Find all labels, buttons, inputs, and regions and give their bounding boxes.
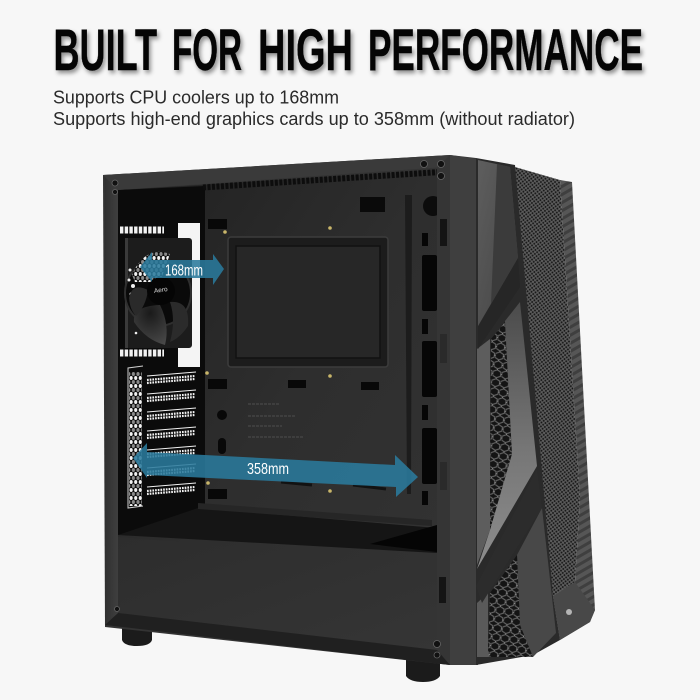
right frame post bbox=[437, 155, 450, 665]
honeycomb behind fan bbox=[132, 252, 170, 282]
middle light panel bbox=[477, 302, 537, 569]
right groove bbox=[405, 195, 412, 494]
pc case bbox=[103, 155, 595, 682]
cpu cutout bbox=[228, 237, 388, 367]
shroud top surface bbox=[118, 508, 437, 553]
honeycomb column bbox=[129, 372, 142, 506]
line: CPU cooler support: Supports CPU coolers up to 168mm bbox=[53, 88, 339, 108]
fan rail bbox=[125, 238, 128, 348]
psu shroud bbox=[118, 503, 437, 650]
top notch bbox=[360, 197, 385, 212]
upper shard bbox=[478, 160, 518, 326]
fan opening bbox=[125, 260, 191, 326]
pci slot bracket bbox=[128, 366, 196, 508]
fan housing bbox=[126, 238, 192, 348]
bottom vent row bbox=[120, 350, 164, 356]
front bezel column bbox=[450, 155, 478, 665]
panel faint marks bbox=[248, 404, 304, 437]
left frame post bbox=[105, 176, 118, 626]
line: graphics card support: Supports high-end graphics cards up to 358mm (without radiator) bbox=[53, 109, 575, 129]
diagonal band lower bbox=[476, 469, 542, 603]
shroud front bbox=[118, 537, 437, 650]
front corner base bbox=[553, 582, 595, 640]
brand emblem bbox=[566, 609, 572, 615]
case body frame bbox=[103, 155, 476, 665]
bottom frame rail bbox=[105, 613, 450, 665]
arrow: cpu cooler clearance 168mm bbox=[140, 252, 224, 285]
arrow: graphics card clearance 358mm bbox=[133, 443, 418, 497]
dark bezel behind panels bbox=[476, 158, 560, 665]
brand logo: Aero bbox=[154, 286, 168, 295]
fan edge specks bbox=[128, 268, 180, 334]
shard facet bbox=[491, 164, 518, 304]
shroud opening bbox=[370, 525, 437, 552]
title: FOR bbox=[172, 18, 242, 83]
arrow shape bbox=[140, 252, 224, 285]
arrow shape bbox=[133, 443, 418, 497]
fan bbox=[125, 238, 192, 348]
honeycomb vent upper bbox=[490, 322, 512, 530]
right post notches bbox=[439, 219, 447, 603]
cable routing holes bbox=[422, 233, 437, 505]
carbon fibre edge bbox=[553, 180, 595, 640]
lower slots bbox=[281, 482, 386, 489]
cutout frame bbox=[228, 237, 388, 367]
diagonal band upper bbox=[478, 258, 520, 349]
subtitle text block bbox=[53, 88, 575, 129]
pci slots bbox=[147, 372, 196, 494]
top vent row bbox=[120, 226, 164, 234]
title: HIGH bbox=[258, 18, 353, 83]
honeycomb vent lower bbox=[488, 555, 533, 657]
interior main panel bbox=[118, 170, 440, 655]
rear dark section bbox=[118, 186, 205, 535]
column outline bbox=[128, 366, 143, 508]
case foot right bbox=[406, 660, 440, 682]
white rear cutout bbox=[178, 223, 200, 367]
frame screws bbox=[112, 160, 444, 658]
title: BUILT bbox=[54, 18, 157, 83]
honeycomb rows by fan bbox=[120, 230, 164, 353]
fan blades bbox=[129, 287, 188, 345]
perforated mesh side bbox=[515, 167, 580, 596]
title bbox=[54, 18, 643, 83]
arrow label: 358mm bbox=[247, 461, 289, 478]
arrow label: 168mm bbox=[165, 262, 203, 280]
fan hub bbox=[147, 277, 175, 305]
shroud ledge bbox=[198, 503, 432, 526]
lower panel bbox=[517, 508, 556, 657]
cutout inner plate bbox=[236, 246, 380, 358]
standoffs bbox=[205, 226, 332, 493]
top frame rail bbox=[103, 155, 450, 190]
left strip bbox=[477, 339, 490, 565]
round grommet bbox=[423, 196, 443, 216]
lower left strip bbox=[477, 593, 488, 657]
top vent strip bbox=[203, 172, 440, 188]
cable tie holes bbox=[208, 219, 379, 499]
case foot left bbox=[122, 628, 152, 646]
front panel bbox=[476, 158, 595, 665]
